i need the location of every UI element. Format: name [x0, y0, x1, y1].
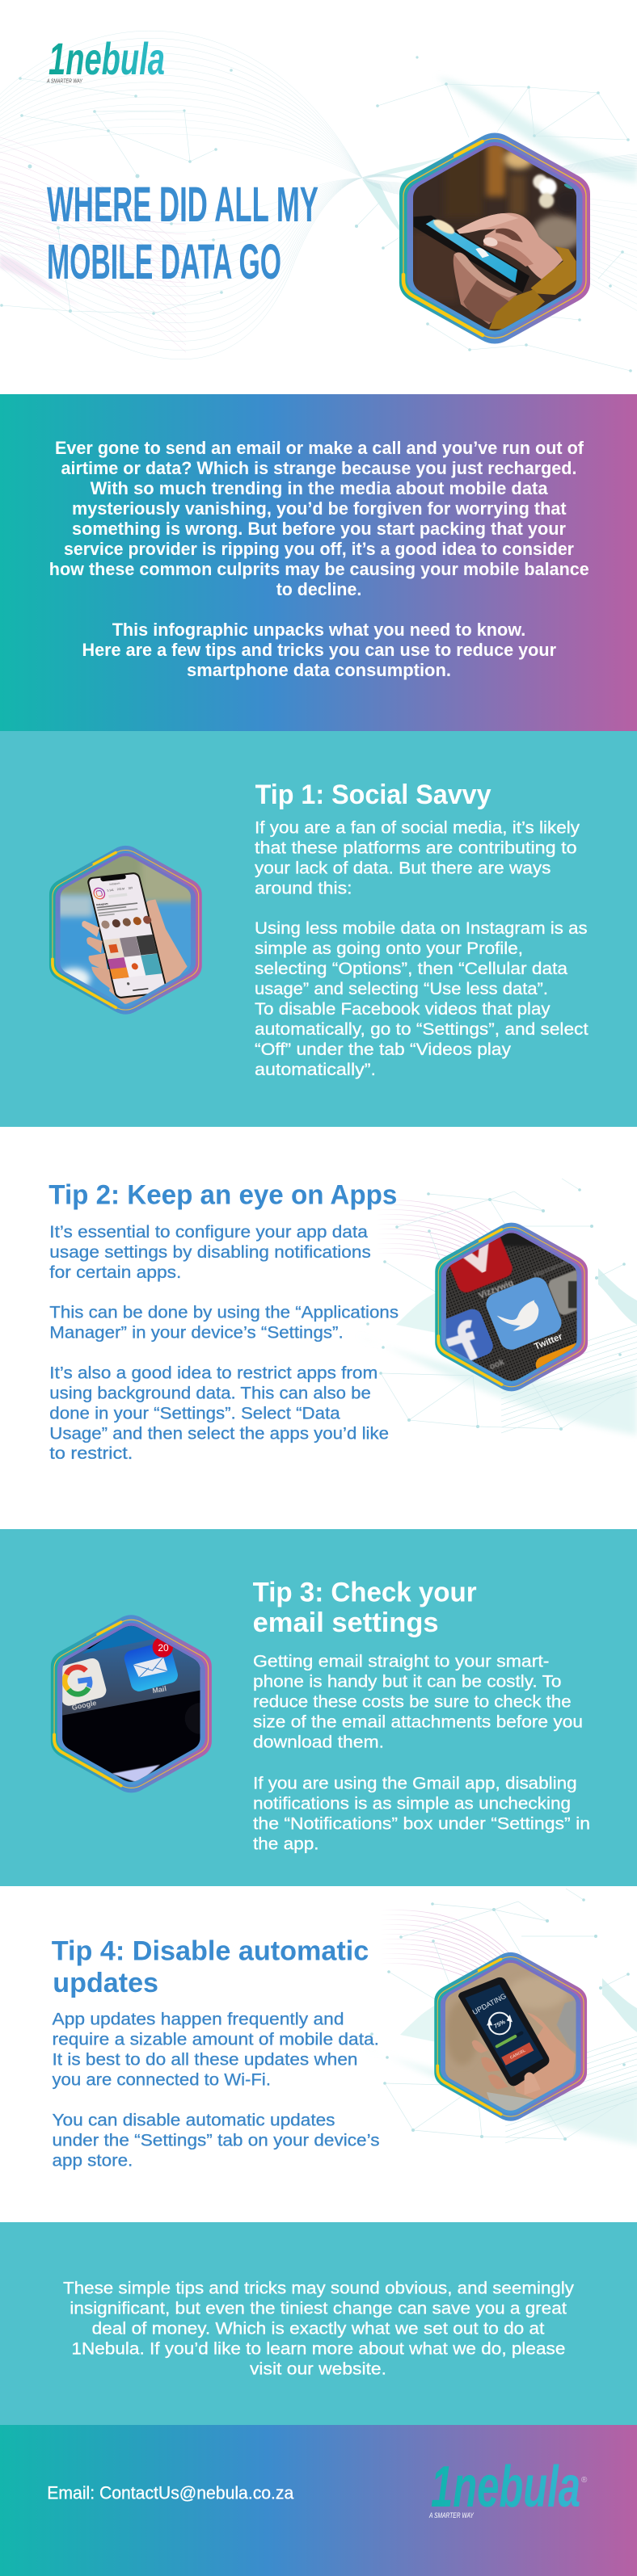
hexagon photo: Google and Mail icons: Mail — [152, 1684, 167, 1695]
tip 1 body: simple as going onto your Profile, — [255, 938, 523, 958]
tip 3 heading — [253, 1578, 477, 1638]
panel: tip 2 — [49, 1178, 637, 1459]
tip 1 body: around this: — [255, 878, 352, 898]
closing text: 1Nebula. If you’d like to learn more about what we do, please — [71, 2338, 565, 2358]
intro text: service provider is ripping you off, it’s a good idea to consider — [64, 539, 574, 559]
tip 1 body: usage” and selecting “Use less data”. — [255, 978, 548, 998]
tip 4 body: require a sizable amount of mobile data. — [52, 2029, 379, 2049]
intro text: smartphone data consumption. — [187, 660, 451, 680]
hexagon photo: hands using phone — [396, 129, 594, 347]
intro text: Here are a few tips and tricks you can use to reduce your — [82, 640, 556, 660]
tip 3 body: size of the email attachments before you — [253, 1711, 583, 1731]
footer logo: A SMARTER WAY — [428, 2511, 475, 2519]
logo: 1nebula — [49, 33, 165, 84]
tip 1 body: “Off” under the tab “Videos play — [255, 1039, 511, 1059]
panel: tip 4 — [52, 1889, 637, 2170]
panel: footer — [0, 2425, 637, 2576]
tip 1 body: To disable Facebook videos that play — [255, 998, 551, 1019]
tip 3 body: download them. — [253, 1731, 384, 1751]
background network and waves — [360, 1889, 637, 2145]
intro text — [49, 438, 589, 680]
footer logo: ® — [581, 2476, 588, 2485]
panel: header — [0, 31, 637, 372]
panel: tip 1 — [0, 731, 637, 1127]
tip 3 body: If you are using the Gmail app, disabling — [253, 1772, 577, 1792]
hexagon photo: app icons: Twitter — [533, 1332, 564, 1352]
tip 4 heading: updates — [53, 1968, 158, 1998]
hexagon photo: Google and Mail icons — [47, 1611, 217, 1798]
logo: A SMARTER WAY — [46, 78, 83, 84]
hexagon photo: Instagram on phone: 233 M — [116, 887, 125, 891]
tip 2 body — [49, 1221, 399, 1463]
closing text: insignificant, but even the tiniest change can save you a great — [70, 2297, 567, 2318]
tip 2 heading: Tip 2: Keep an eye on Apps — [49, 1180, 397, 1211]
tip 4 body: It is best to do all these updates when — [52, 2049, 357, 2070]
hexagon photo: phone updating: 75% — [492, 2018, 507, 2030]
intro text: airtime or data? Which is strange because you just recharged. — [61, 458, 577, 478]
tip 2 body: to restrict. — [49, 1443, 133, 1463]
logo — [46, 33, 165, 84]
closing text: These simple tips and tricks may sound obvious, and seemingly — [63, 2277, 574, 2297]
intro text: mysteriously vanishing, you’d be forgiven for worrying that — [72, 498, 567, 519]
panel: closing message — [0, 2222, 637, 2425]
hexagon photo: Instagram on phone: 5 141 — [107, 889, 114, 893]
tip 1 body: If you are a fan of social media, it’s likely — [255, 817, 580, 838]
tip 1 body: that these platforms are contributing to — [255, 838, 577, 858]
tip 2 body: Manager” in your device’s “Settings”. — [49, 1322, 344, 1343]
panel: intro — [0, 394, 637, 731]
intro text: to decline. — [276, 579, 361, 599]
tip 2 body: Usage” and then select the apps you’d like — [49, 1423, 389, 1443]
hexagon photo: Google and Mail icons: Google — [71, 1699, 97, 1712]
hexagon photo: Instagram on phone: Instagram — [109, 881, 120, 886]
title: WHERE DID ALL MY — [47, 177, 318, 233]
tip 2 body: It’s also a good idea to restrict apps from — [49, 1363, 378, 1383]
hexagon photo: Instagram on phone: Instagram — [95, 902, 108, 906]
tip 2 body: for certain apps. — [49, 1262, 181, 1282]
background network and waves — [356, 1179, 637, 1435]
contact email: Email: ContactUs@nebula.co.za — [47, 2482, 294, 2502]
hexagon photo: Google and Mail icons: 20 — [158, 1642, 169, 1654]
hexagon photo: app icons: ook — [488, 1358, 506, 1372]
tip 4 body — [52, 2009, 380, 2170]
tip 4 body: app store. — [52, 2150, 133, 2170]
hexagon photo: Instagram on phone — [49, 845, 202, 1015]
tip 2 body: This can be done by using the “Applications — [49, 1302, 399, 1322]
tip 2 body: usage settings by disabling notifications — [49, 1242, 371, 1262]
tip 3 heading: email settings — [253, 1607, 439, 1638]
closing text — [63, 2277, 574, 2378]
hexagon photo: phone updating: CANCEL — [509, 2049, 526, 2061]
tip 3 body: phone is handy but it can be costly. To — [253, 1670, 561, 1691]
tip 2 body: It’s essential to configure your app data — [49, 1221, 369, 1242]
tip 4 heading — [52, 1936, 369, 1998]
intro text: Ever gone to send an email or make a call and you’ve run out of — [55, 438, 584, 458]
tip 1 heading: Tip 1: Social Savvy — [255, 780, 491, 810]
tip 2 body: done in your “Settings”. Select “Data — [49, 1403, 341, 1423]
closing text: visit our website. — [250, 2358, 386, 2378]
closing text: deal of money. Which is exactly what we set out to do at — [92, 2318, 544, 2338]
tip 3 body — [253, 1650, 590, 1853]
tip 4 heading: Tip 4: Disable automatic — [52, 1936, 369, 1967]
tip 3 body: reduce these costs be sure to check the — [253, 1691, 572, 1711]
hexagon photo: Instagram on phone: 183 — [128, 886, 133, 890]
tip 2 body: using background data. This can also be — [49, 1383, 371, 1403]
tip 3 body: the “Notifications” box under “Settings” in — [253, 1813, 590, 1833]
tip 1 body: selecting “Options”, then “Cellular data — [255, 958, 568, 978]
title — [47, 177, 318, 290]
tip 1 body: Using less mobile data on Instagram is as — [255, 918, 588, 938]
tip 4 body: App updates happen frequently and — [52, 2009, 344, 2029]
intro text: how these common culprits may be causing your mobile balance — [49, 559, 589, 579]
tip 4 body: under the “Settings” tab on your device’s — [52, 2130, 380, 2150]
panel: tip 3 — [0, 1529, 637, 1886]
hexagon photo: app icons: Vizzywig — [477, 1278, 515, 1301]
tip 4 body: You can disable automatic updates — [52, 2110, 335, 2130]
tip 1 body: automatically, go to “Settings”, and select — [255, 1019, 588, 1039]
hexagon photo: app icons: Hipstamatic — [532, 1257, 572, 1279]
intro text: This infographic unpacks what you need to know. — [112, 620, 525, 640]
tip 3 body: notifications is as simple as unchecking — [253, 1792, 571, 1813]
tip 4 body: you are connected to Wi-Fi. — [52, 2070, 271, 2090]
title: MOBILE DATA GO — [47, 234, 281, 290]
tip 3 body: Getting email straight to your smart- — [253, 1650, 550, 1670]
tip 3 heading: Tip 3: Check your — [253, 1578, 477, 1608]
intro text: With so much trending in the media about mobile data — [91, 478, 548, 498]
tip 1 body: your lack of data. But there are ways — [255, 858, 551, 878]
intro text: something is wrong. But before you start packing that your — [72, 519, 566, 539]
tip 1 body: automatically”. — [255, 1059, 376, 1079]
hexagon photo: phone updating — [434, 1952, 587, 2121]
hexagon photo: phone updating: UPDATING — [471, 1992, 508, 2016]
background wave pattern — [0, 31, 637, 372]
tip 1 body — [255, 817, 588, 1079]
hexagon photo: app icons — [435, 1223, 588, 1391]
tip 3 body: the app. — [253, 1833, 318, 1853]
